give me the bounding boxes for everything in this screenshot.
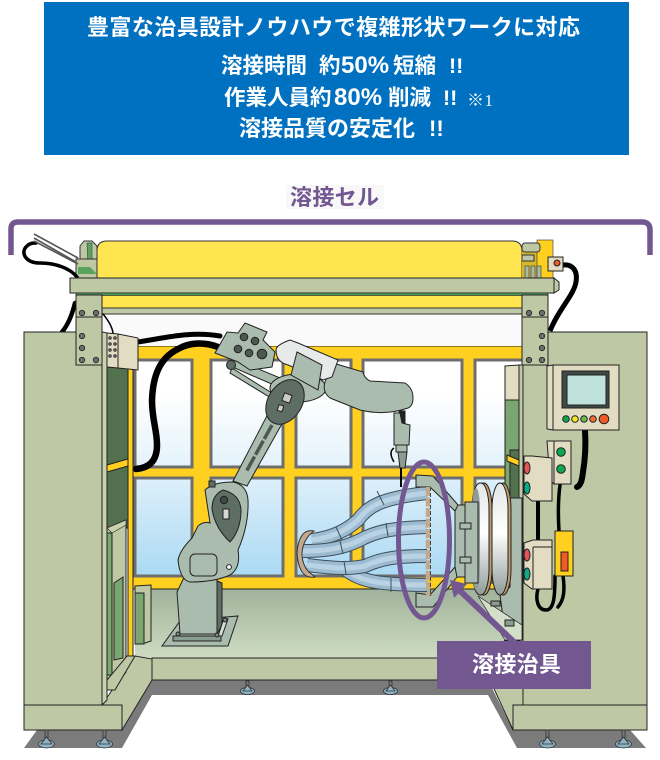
robot joint disc (270, 374, 326, 402)
robot welding torch (391, 411, 410, 487)
benefit: labor: 作業人員約 (224, 86, 332, 110)
mounting plates (455, 502, 478, 583)
left cabinet (24, 295, 152, 730)
footnote mark: ※1 (467, 91, 493, 110)
highlight ellipse: welding jig (398, 462, 450, 618)
robot wrist motor plate (215, 323, 275, 370)
benefit: welding time: 約 (319, 54, 341, 78)
welding tubes (303, 491, 427, 592)
robot white motor (276, 340, 338, 380)
red button box (548, 257, 563, 271)
right post with bolts (522, 295, 548, 365)
arrow: callout to jig (450, 580, 515, 643)
top beam (70, 278, 559, 296)
right cabinet (513, 295, 647, 730)
right rail end (522, 245, 538, 278)
right cabinet interior (490, 365, 523, 730)
welding jig assembly (416, 475, 522, 640)
window wall (128, 346, 525, 589)
tube joints (336, 491, 391, 592)
left plinth side (102, 656, 152, 730)
switch box: green lights (547, 441, 571, 484)
benefit: welding time: 50% (341, 52, 389, 79)
window panes (135, 360, 525, 576)
ceiling gap (102, 314, 523, 346)
label: welding cell: 溶接セル (290, 185, 379, 210)
hanging rods (34, 234, 78, 264)
panel screen (562, 371, 609, 408)
robot (162, 323, 413, 646)
floor shadow (24, 680, 646, 748)
robot rear link (226, 358, 285, 398)
robot motor housing (291, 352, 322, 390)
adjuster feet (38, 681, 632, 748)
robot upper arm (324, 363, 413, 413)
robot lower arm (233, 410, 283, 486)
jig ring (426, 487, 430, 596)
robot elbow (258, 373, 312, 431)
stand (478, 498, 522, 640)
switch box: lower push buttons (524, 540, 552, 589)
canopy (76, 240, 553, 314)
rotary discs (472, 483, 511, 595)
tube flange (297, 531, 315, 577)
benefit: quality: !! (429, 116, 444, 141)
bracket: welding cell extent (11, 222, 650, 255)
floor (135, 589, 525, 680)
left cabinet interior (107, 365, 151, 690)
jig brackets (416, 475, 458, 607)
operator panel (547, 365, 619, 430)
right cable (550, 265, 576, 331)
left post with bolts (76, 295, 102, 365)
headline: 豊富な治具設計ノウハウで複雑形状ワークに対応 (87, 15, 580, 40)
benefit: labor: !! (443, 86, 457, 110)
benefit: welding time: 短縮 (393, 54, 436, 78)
header banner (44, 2, 629, 155)
callout: welding jig: 溶接治具 (472, 652, 561, 677)
robot base plate (162, 616, 238, 646)
benefit: labor: 削減 (388, 86, 432, 110)
left rail end (80, 241, 97, 278)
callout: welding jig (437, 641, 591, 689)
robot pedestal (173, 565, 228, 641)
tube 4 (345, 569, 427, 585)
control cables (537, 430, 585, 610)
tube 3 (307, 556, 427, 568)
panel indicator lights (563, 414, 609, 424)
switch box: upper push buttons (524, 456, 552, 501)
connector boxes (107, 333, 138, 370)
tube 2 (303, 527, 427, 551)
emergency switch (555, 531, 573, 576)
benefit: welding time: 溶接時間 (221, 54, 307, 78)
left cable bundle (24, 243, 220, 469)
robot shoulder body (178, 482, 248, 582)
tube 1 (312, 493, 427, 540)
benefit: labor: 80% (334, 84, 382, 111)
benefit: quality: 溶接品質の安定化 (239, 116, 415, 141)
benefit: welding time: !! (449, 54, 463, 78)
